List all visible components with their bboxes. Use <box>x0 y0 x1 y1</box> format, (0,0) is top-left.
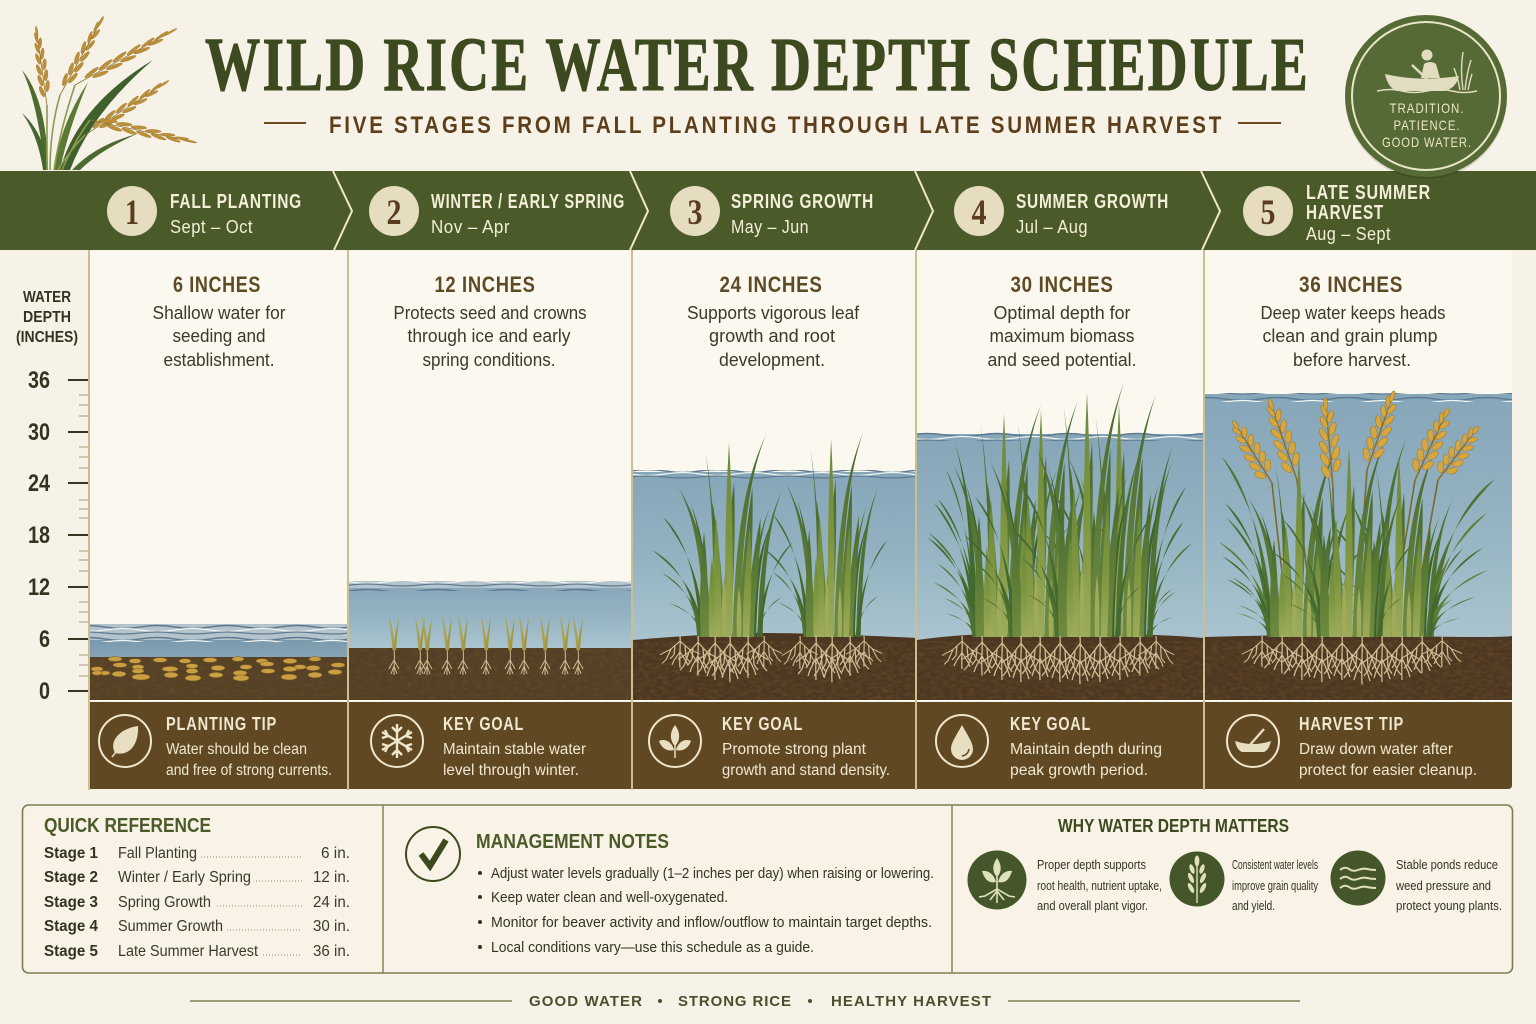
stage 4 header: 4 <box>972 192 986 232</box>
depth axis: 0 <box>39 678 50 705</box>
depth axis: WATER <box>23 289 71 306</box>
tip panel: key goal spring: KEY GOAL <box>722 714 803 734</box>
description <box>687 303 860 370</box>
panel: quick reference <box>44 815 350 960</box>
depth label 36 inches: 36 INCHES <box>1299 272 1403 297</box>
stage 3 header <box>670 186 874 237</box>
badge: tradition patience good water: GOOD WATER. <box>1382 134 1472 150</box>
row stage 4: 30 in. <box>313 918 350 935</box>
tip panel: planting tip: PLANTING TIP <box>166 714 277 734</box>
icon: check mark <box>406 827 460 881</box>
tip panel: key goal winter: level through winter. <box>443 762 579 779</box>
row stage 3 <box>44 894 350 911</box>
stage 3 header: 3 <box>688 192 702 232</box>
row stage 1: 6 in. <box>321 845 350 862</box>
plants <box>1219 387 1495 637</box>
column 4: summer growth <box>917 272 1204 700</box>
stage 5 header: 5 <box>1260 192 1276 232</box>
tip panel: harvest tip: Draw down water after <box>1299 741 1453 758</box>
row stage 5 <box>44 943 350 960</box>
description: Protects seed and crowns <box>394 303 586 323</box>
stage 4 header: SUMMER GROWTH <box>1016 191 1169 213</box>
row stage 1 <box>44 845 350 862</box>
icon: plant with roots <box>968 850 1026 910</box>
plants <box>927 382 1192 638</box>
depth axis: 24 <box>28 470 51 497</box>
description: Deep water keeps heads <box>1260 303 1446 323</box>
description: and seed potential. <box>988 350 1136 370</box>
soil <box>917 634 1204 700</box>
depth axis: 6 <box>39 626 50 653</box>
depth axis: 36 <box>28 367 50 394</box>
badge: tradition patience good water <box>1345 15 1507 179</box>
panel: management notes: Monitor for beaver activity and inflow/outflow to maintain target depths. <box>491 914 932 931</box>
plants <box>652 431 887 637</box>
description: establishment. <box>164 350 274 370</box>
row stage 4: Summer Growth <box>118 918 223 935</box>
panel: why water depth matters: and yield. <box>1232 899 1275 913</box>
panel: management notes: Adjust water levels gradually (1–2 inches per day) when raising or lowering. <box>491 865 934 882</box>
roots <box>942 636 1174 684</box>
icon: waves <box>1330 850 1386 906</box>
panel: why water depth matters: root health, nutrient uptake, <box>1037 879 1162 893</box>
water <box>90 624 348 658</box>
tip panel: planting tip <box>90 702 347 789</box>
panel: management notes <box>406 827 934 956</box>
tip panel: key goal summer: Maintain depth during <box>1010 741 1162 758</box>
stage 4 header <box>954 186 1169 237</box>
tip panel: key goal winter <box>349 702 631 789</box>
roots <box>660 636 882 682</box>
stage 1 header <box>107 186 302 237</box>
water <box>917 432 1204 644</box>
tip panel: key goal spring: Promote strong plant <box>722 741 867 758</box>
stage banner <box>0 171 1536 250</box>
panel: management notes: Keep water clean and well-oxygenated. <box>491 889 728 906</box>
footer tagline: STRONG RICE <box>678 993 791 1010</box>
description <box>394 303 586 370</box>
soil <box>633 633 916 700</box>
tip panel: key goal winter: KEY GOAL <box>443 714 524 734</box>
description <box>1260 303 1446 370</box>
row stage 1: Stage 1 <box>44 845 98 862</box>
panel: management notes: Local conditions vary—use this schedule as a guide. <box>491 939 814 956</box>
panel: quick reference: QUICK REFERENCE <box>44 815 211 837</box>
stage 2 header <box>369 186 625 237</box>
panel: management notes: MANAGEMENT NOTES <box>476 831 669 853</box>
footer tagline <box>190 993 1300 1010</box>
row stage 2 <box>44 869 350 886</box>
description: maximum biomass <box>990 326 1134 346</box>
icon: grain <box>1170 852 1224 906</box>
row stage 3: Stage 3 <box>44 894 98 911</box>
water <box>1205 393 1512 644</box>
icon: leaf <box>99 715 151 767</box>
description: Shallow water for <box>152 303 286 323</box>
icon: sprout <box>649 715 701 767</box>
panel: why water depth matters <box>968 816 1502 913</box>
row stage 2: 12 in. <box>313 869 350 886</box>
badge: tradition patience good water: PATIENCE. <box>1394 117 1460 133</box>
panel: why water depth matters: improve grain quality <box>1232 879 1319 893</box>
depth label 24 inches: 24 INCHES <box>720 272 822 297</box>
description <box>152 303 286 370</box>
tip panel: key goal summer: peak growth period. <box>1010 762 1148 779</box>
description: through ice and early <box>408 326 570 346</box>
tip panel: planting tip: Water should be clean <box>166 741 307 758</box>
stage 2 header: Nov – Apr <box>431 217 510 237</box>
icon: water drop <box>936 715 988 767</box>
icon: snowflake <box>371 715 423 767</box>
tip panel: key goal spring: growth and stand density. <box>722 762 890 779</box>
description: Optimal depth for <box>994 303 1130 323</box>
row stage 5: Late Summer Harvest <box>118 943 259 960</box>
row stage 3: 24 in. <box>313 894 350 911</box>
column 2: winter / early spring <box>349 272 632 700</box>
tip panel: key goal winter: Maintain stable water <box>443 741 586 758</box>
row stage 2: Stage 2 <box>44 869 98 886</box>
row stage 5: Stage 5 <box>44 943 98 960</box>
stage 2 header: 2 <box>386 192 402 232</box>
row stage 5: 36 in. <box>313 943 350 960</box>
panel: why water depth matters: and overall plant vigor. <box>1037 899 1148 913</box>
footer tagline: GOOD WATER <box>529 993 642 1010</box>
description: development. <box>719 350 825 370</box>
description: seeding and <box>172 326 266 346</box>
depth axis: DEPTH <box>23 309 71 326</box>
panel: why water depth matters: Proper depth supports <box>1037 858 1146 872</box>
description: spring conditions. <box>422 350 556 370</box>
depth axis: 12 <box>28 574 50 601</box>
roots <box>1242 636 1462 684</box>
tip panel: key goal summer: KEY GOAL <box>1010 714 1091 734</box>
row stage 3: Spring Growth <box>118 894 211 911</box>
seedlings <box>389 615 583 675</box>
column 3: spring growth <box>633 272 916 700</box>
stage 5 header: HARVEST <box>1306 202 1384 224</box>
column dividers <box>89 250 1204 790</box>
description: before harvest. <box>1293 350 1411 370</box>
stage 5 header <box>1243 182 1431 244</box>
soil <box>349 648 632 700</box>
stage 2 header: WINTER / EARLY SPRING <box>431 191 625 213</box>
row stage 4 <box>44 918 350 935</box>
soil and seeds <box>90 657 348 700</box>
bottom panel frame <box>22 805 1512 973</box>
depth axis <box>16 289 88 705</box>
depth axis: 30 <box>28 419 50 446</box>
water <box>349 581 632 649</box>
panel: why water depth matters: Stable ponds reduce <box>1396 858 1498 872</box>
stage 1 header: FALL PLANTING <box>170 191 302 213</box>
stage 3 header: SPRING GROWTH <box>731 191 874 213</box>
tip panel: planting tip: and free of strong currents. <box>166 762 332 779</box>
tip panel: key goal summer <box>917 702 1203 789</box>
description: Supports vigorous leaf <box>687 303 860 323</box>
stage 1 header: Sept – Oct <box>170 217 253 237</box>
description <box>988 303 1136 370</box>
stage 1 header: 1 <box>125 192 139 232</box>
row stage 2: Winter / Early Spring <box>118 869 251 886</box>
soil <box>1205 635 1512 700</box>
tip panel: harvest tip: HARVEST TIP <box>1299 714 1404 734</box>
stage 5 header: Aug – Sept <box>1306 224 1391 244</box>
depth axis: (INCHES) <box>16 329 78 346</box>
stage 3 header: May – Jun <box>731 217 809 237</box>
illustration: rice sprig <box>22 13 198 170</box>
footer tagline: HEALTHY HARVEST <box>831 993 991 1010</box>
tip panel: harvest tip <box>1205 702 1512 789</box>
water <box>633 470 916 644</box>
subtitle: FIVE STAGES FROM FALL PLANTING THROUGH LATE SUMMER HARVEST <box>329 112 1224 139</box>
panel: why water depth matters: Consistent water levels <box>1232 858 1318 872</box>
depth label 6 inches: 6 INCHES <box>173 272 261 297</box>
column 5: late summer harvest <box>1205 272 1512 700</box>
depth label 30 inches: 30 INCHES <box>1010 272 1114 297</box>
description: clean and grain plump <box>1262 326 1438 346</box>
tip panel: key goal spring <box>633 702 915 789</box>
stage 5 header: LATE SUMMER <box>1306 182 1431 204</box>
badge: tradition patience good water: TRADITION. <box>1390 100 1464 116</box>
tip panel: harvest tip: protect for easier cleanup. <box>1299 762 1477 779</box>
row stage 1: Fall Planting <box>118 845 197 862</box>
chart area background <box>89 251 1512 701</box>
stage 4 header: Jul – Aug <box>1016 217 1088 237</box>
panel: why water depth matters: protect young plants. <box>1396 899 1502 913</box>
icon: canoe <box>1227 715 1279 767</box>
depth axis: 18 <box>28 522 50 549</box>
panel: why water depth matters: weed pressure and <box>1395 879 1491 893</box>
depth label 12 inches: 12 INCHES <box>434 272 536 297</box>
panel: why water depth matters: WHY WATER DEPTH MATTERS <box>1058 816 1289 836</box>
column 1: fall planting <box>90 272 348 700</box>
row stage 4: Stage 4 <box>44 918 98 935</box>
description: growth and root <box>709 326 835 346</box>
